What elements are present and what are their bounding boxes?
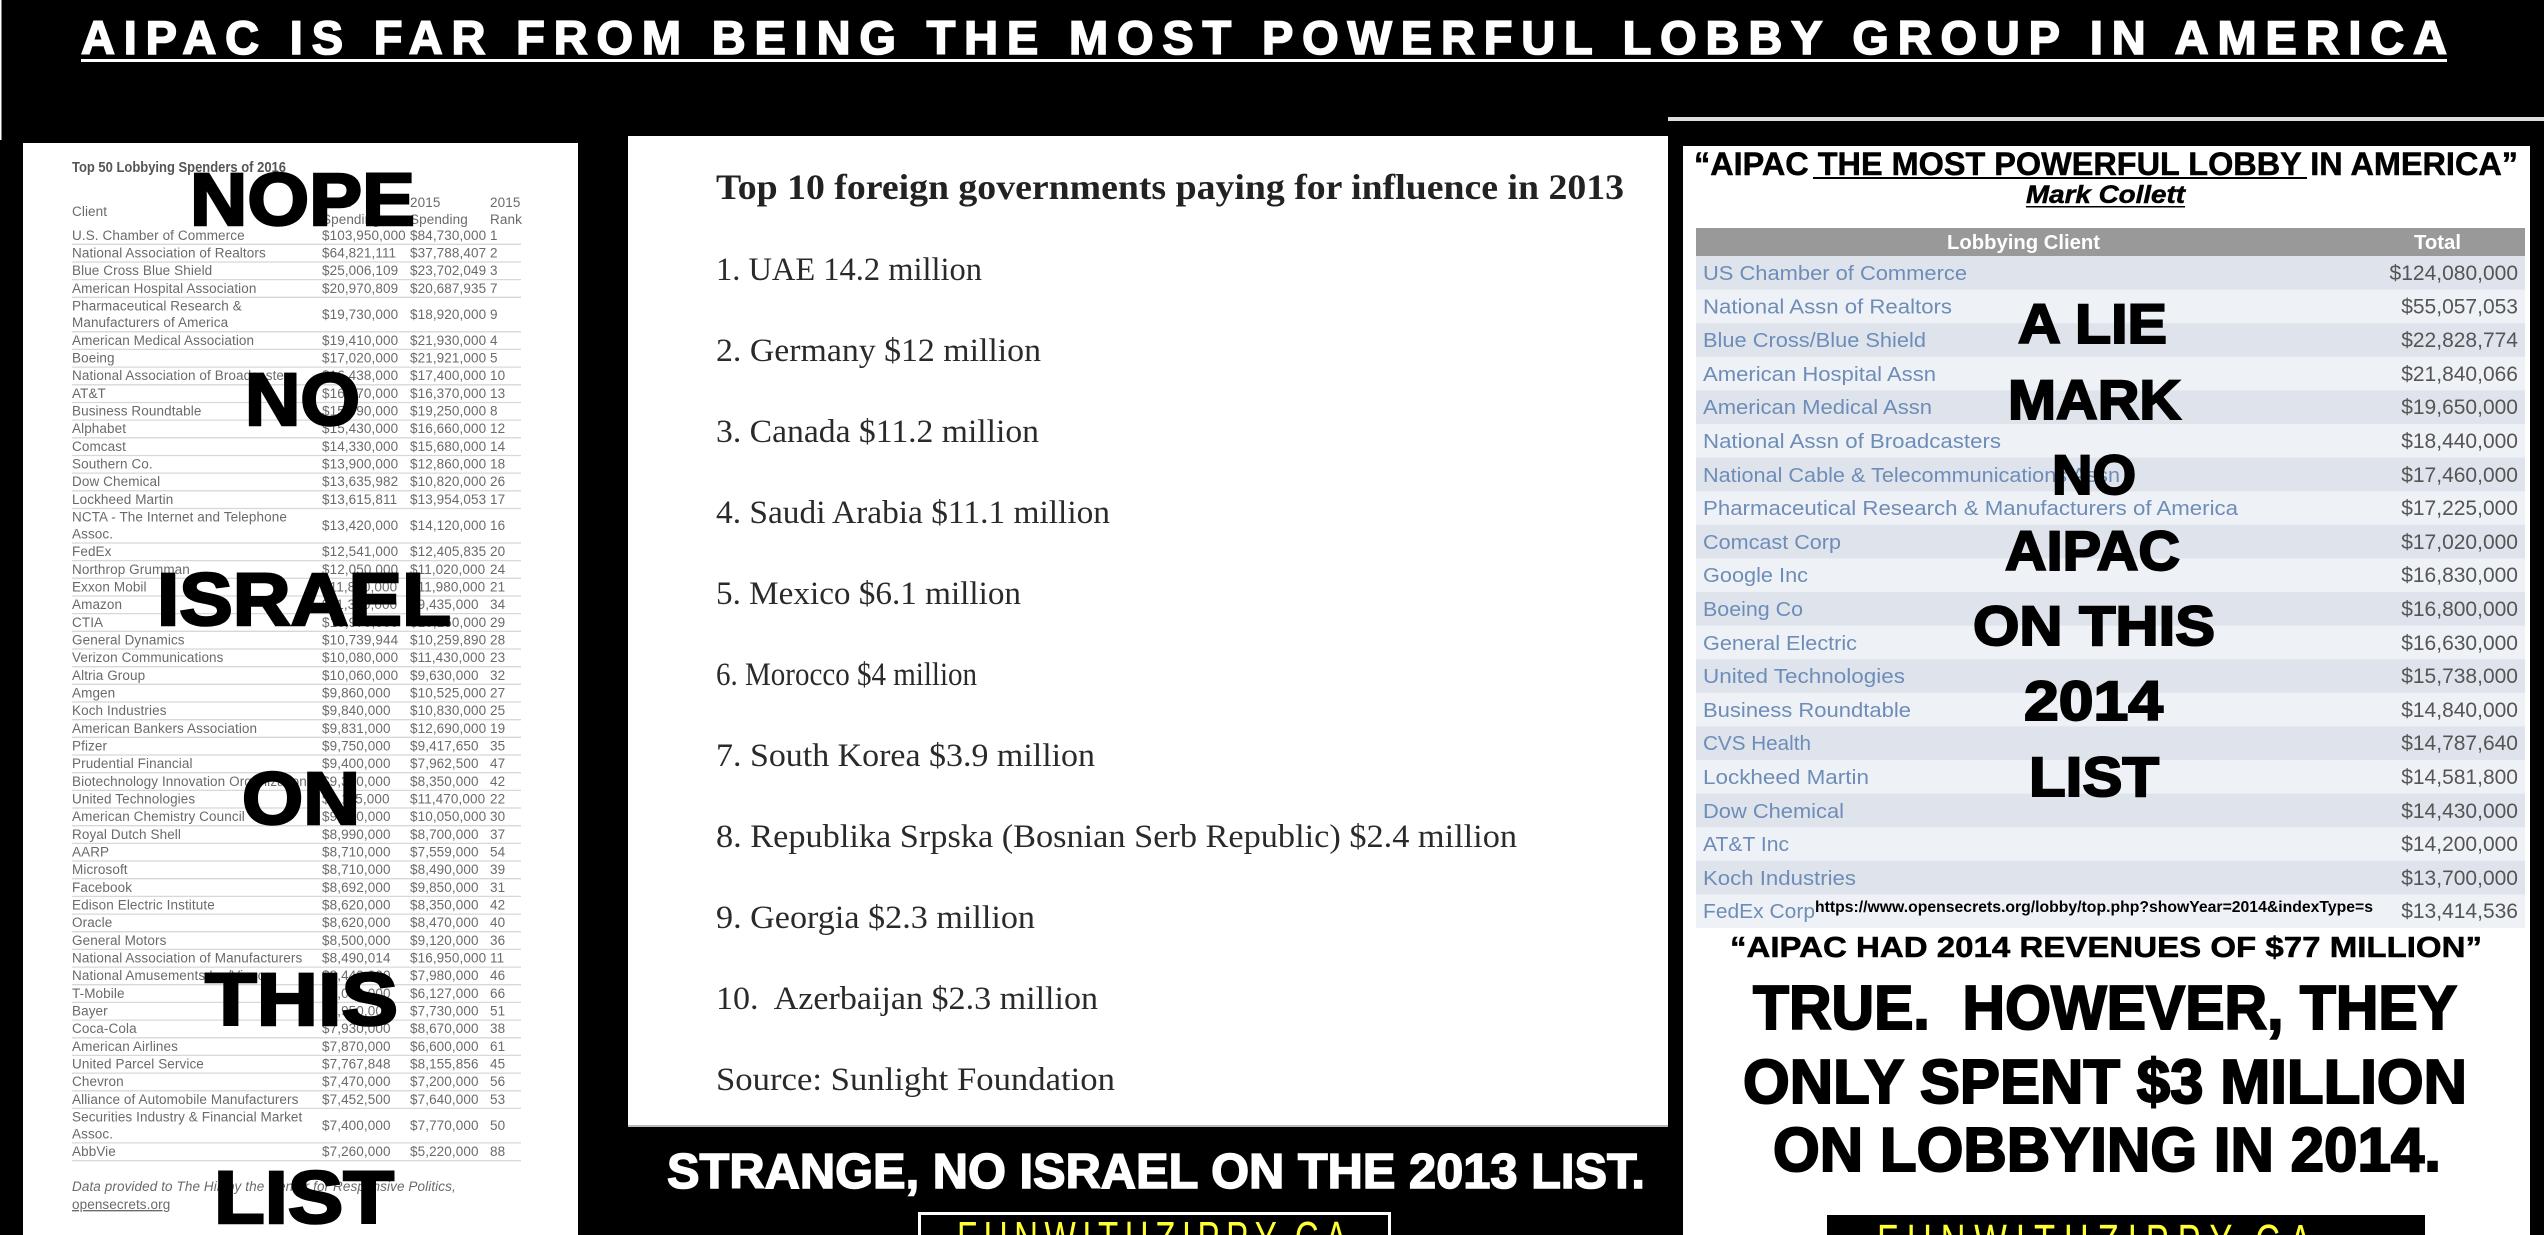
table: lobbying spenders: 5: [490, 350, 498, 366]
table: lobbying spenders: AT&T: [72, 386, 106, 401]
ranked list: 7. South Korea $3.9 million: [716, 738, 1095, 774]
table: lobbying spenders: 38: [490, 1021, 505, 1036]
table: lobbying spenders: $11,350,000: [322, 597, 397, 612]
table: 2014 lobbying clients: $13,414,536: [2401, 900, 2518, 923]
table: 2014 lobbying clients: Lobbying Client: [1947, 232, 2100, 254]
table: lobbying spenders: 88: [490, 1144, 505, 1159]
table: lobbying spenders: [72, 195, 522, 1212]
table: 2014 lobbying clients: Blue Cross/Blue Shield: [1703, 330, 1926, 352]
table: 2014 lobbying clients: Comcast Corp: [1703, 532, 1841, 554]
table: lobbying spenders: National Association of Broadcasters: [72, 368, 296, 383]
table: lobbying spenders: $13,615,811: [322, 492, 397, 507]
table: lobbying spenders: Comcast: [72, 439, 126, 454]
table: lobbying spenders: $19,410,000: [322, 333, 398, 348]
table: lobbying spenders: Client: [72, 204, 107, 219]
table: lobbying spenders: $7,980,000: [410, 968, 479, 983]
panel: top 10 foreign governments: [628, 136, 1668, 1127]
table: lobbying spenders: 51: [490, 1004, 505, 1018]
table: lobbying spenders: 53: [490, 1092, 505, 1107]
table: lobbying spenders: United Technologies: [72, 792, 195, 806]
table: lobbying spenders: 28: [490, 632, 505, 648]
table: lobbying spenders: $10,970,000: [322, 615, 398, 630]
table: 2014 lobbying clients: $18,440,000: [2401, 430, 2518, 453]
table: lobbying spenders: $17,400,000: [410, 368, 486, 383]
table: lobbying spenders: $11,020,000: [410, 562, 485, 577]
ranked list: [716, 252, 1517, 1098]
table: lobbying spenders: $10,080,000: [322, 650, 398, 665]
table: 2014 lobbying clients: Business Roundtable: [1703, 700, 1911, 722]
table: lobbying spenders: American Medical Association: [72, 333, 254, 348]
table: 2014 lobbying clients: FedEx Corp: [1703, 901, 1815, 923]
table: lobbying spenders: $5,220,000: [410, 1144, 479, 1159]
table: lobbying spenders: 13: [490, 386, 505, 401]
table: lobbying spenders: Edison Electric Institute: [72, 898, 215, 912]
table: lobbying spenders: 42: [490, 774, 505, 789]
table: lobbying spenders: Bayer: [72, 1004, 108, 1018]
table: lobbying spenders: $7,930,000: [322, 1021, 391, 1036]
table: lobbying spenders: Southern Co.: [72, 456, 153, 472]
table: lobbying spenders: Microsoft: [72, 862, 128, 877]
table: lobbying spenders: Biotechnology Innovation Organization: [72, 774, 307, 789]
table: lobbying spenders: $9,630,000: [410, 668, 479, 683]
ranked list: 8. Republika Srpska (Bosnian Serb Republic) $2.4 million: [716, 819, 1517, 855]
table: lobbying spenders: $7,400,000: [322, 1118, 391, 1133]
divider bar above right panel: [1668, 117, 2544, 121]
table: lobbying spenders: 66: [490, 986, 505, 1001]
table: lobbying spenders: $7,767,848: [322, 1056, 391, 1072]
table: lobbying spenders: Royal Dutch Shell: [72, 827, 181, 842]
table: lobbying spenders: $13,635,982: [322, 474, 398, 489]
table: lobbying spenders: General Dynamics: [72, 632, 185, 648]
overlay text: ON THIS: ON THIS: [1973, 594, 2215, 657]
table: 2014 lobbying clients: $16,830,000: [2401, 564, 2518, 587]
table: lobbying spenders: National Association of Manufacturers: [72, 950, 302, 966]
table: lobbying spenders: 27: [490, 686, 505, 700]
table: 2014 lobbying clients: American Hospital Assn: [1703, 364, 1936, 386]
table: lobbying spenders: Altria Group: [72, 668, 145, 683]
table: lobbying spenders: $8,490,000: [410, 862, 479, 877]
table: lobbying spenders: $13,954,053: [410, 492, 486, 507]
table: 2014 lobbying clients: Total: [2414, 232, 2461, 254]
table: lobbying spenders: $10,820,000: [410, 474, 486, 489]
table: 2014 lobbying clients: $21,840,066: [2401, 363, 2518, 386]
table: lobbying spenders: 11: [490, 950, 504, 966]
table: lobbying spenders: $16,370,000: [322, 386, 398, 401]
table: 2014 lobbying clients: $15,738,000: [2401, 665, 2518, 688]
table: lobbying spenders: 31: [490, 880, 505, 895]
table: lobbying spenders: $8,620,000: [322, 915, 391, 930]
table: lobbying spenders: $7,770,000: [410, 1118, 479, 1133]
table: lobbying spenders: Spending: [322, 212, 380, 227]
table: lobbying spenders: $8,350,000: [410, 898, 479, 912]
table: lobbying spenders: AbbVie: [72, 1144, 116, 1159]
overlay text: MARK: MARK: [2008, 368, 2181, 431]
table: lobbying spenders: $8,710,000: [322, 844, 391, 860]
table: lobbying spenders: 35: [490, 738, 505, 754]
ranked list: 10. Azerbaijan $2.3 million: [716, 981, 1098, 1017]
table: lobbying spenders: 16: [490, 518, 505, 533]
table: lobbying spenders: $9,831,000: [322, 721, 391, 736]
table: lobbying spenders: 1: [490, 228, 498, 243]
table: lobbying spenders: $10,739,944: [322, 632, 399, 648]
heading: Top 10 foreign governments paying for influence in 2013: [716, 167, 1624, 207]
table: lobbying spenders: $7,962,500: [410, 756, 479, 771]
table: lobbying spenders: 4: [490, 333, 498, 348]
table: 2014 lobbying clients: Pharmaceutical Research & Manufacturers of America: [1703, 498, 2239, 520]
table: lobbying spenders: $9,010,000: [322, 809, 391, 824]
table: lobbying spenders: $8,080,000: [322, 986, 391, 1001]
quote heading: “AIPAC THE MOST POWERFUL LOBBY IN AMERICA”: [1694, 146, 2518, 182]
table: 2014 lobbying clients: $17,225,000: [2401, 497, 2518, 520]
table: lobbying spenders: Alphabet: [72, 421, 126, 436]
ranked list: 4. Saudi Arabia $11.1 million: [716, 495, 1110, 531]
table: lobbying spenders: United Parcel Service: [72, 1056, 204, 1072]
table: lobbying spenders: Rank: [490, 212, 522, 227]
table: lobbying spenders: $9,120,000: [410, 933, 479, 948]
table: lobbying spenders: $8,710,000: [322, 862, 391, 877]
table: lobbying spenders: Spending: [410, 212, 468, 227]
table: 2014 lobbying clients: $22,828,774: [2401, 329, 2518, 352]
table: lobbying spenders: $10,830,000: [410, 703, 486, 718]
rebuttal text: TRUE. HOWEVER, THEY: [1753, 974, 2457, 1043]
table: 2014 lobbying clients: US Chamber of Commerce: [1703, 263, 1967, 285]
table: lobbying spenders: Securities Industry & Financial Market: [72, 1110, 303, 1124]
table: 2014 lobbying clients: Boeing Co: [1703, 599, 1803, 621]
table: lobbying spenders: $8,440,000: [322, 968, 391, 983]
table: lobbying spenders: 3: [490, 263, 498, 278]
overlay text: NOPE: NOPE: [190, 158, 415, 241]
table: 2014 lobbying clients: $13,700,000: [2401, 867, 2518, 890]
table: lobbying spenders: $10,050,000: [410, 809, 486, 824]
table: lobbying spenders: $7,870,000: [322, 1039, 391, 1054]
table: lobbying spenders: $10,525,000: [410, 686, 486, 700]
table: lobbying spenders: 39: [490, 862, 505, 877]
table: lobbying spenders: Koch Industries: [72, 703, 167, 718]
panel: 2014 lobbying list: [1683, 146, 2530, 1235]
table: lobbying spenders: National Association of Realtors: [72, 246, 266, 260]
table: lobbying spenders: American Airlines: [72, 1039, 178, 1054]
table: lobbying spenders: $16,370,000: [410, 386, 486, 401]
table: 2014 lobbying clients: $14,430,000: [2401, 800, 2518, 823]
table: 2014 lobbying clients: $14,200,000: [2401, 833, 2518, 856]
table: lobbying spenders: Alliance of Automobile Manufacturers: [72, 1092, 299, 1107]
table: lobbying spenders: AARP: [72, 844, 109, 860]
table: 2014 lobbying clients: $14,840,000: [2401, 699, 2518, 722]
table: lobbying spenders: Verizon Communications: [72, 650, 224, 665]
table: lobbying spenders: $20,687,935: [410, 281, 486, 296]
table: 2014 lobbying clients: United Technologies: [1703, 666, 1905, 688]
table: lobbying spenders: 18: [490, 456, 505, 472]
table: lobbying spenders: 10: [490, 368, 505, 383]
table: lobbying spenders: 32: [490, 668, 505, 683]
caption: strange, no Israel on the 2013 list: STRANGE, NO ISRAEL ON THE 2013 LIST.: [667, 1145, 1645, 1199]
rebuttal text: [1743, 974, 2467, 1185]
table: 2014 lobbying clients: [1696, 228, 2525, 928]
table: lobbying spenders: $11,840,000: [322, 580, 397, 594]
table: lobbying spenders: U.S. Chamber of Commerce: [72, 228, 245, 243]
table: 2014 lobbying clients: $16,630,000: [2401, 632, 2518, 655]
table: lobbying spenders: Northrop Grumman: [72, 562, 190, 577]
rebuttal text: ON LOBBYING IN 2014.: [1773, 1116, 2441, 1185]
table: lobbying spenders: 36: [490, 933, 505, 948]
table: lobbying spenders: 54: [490, 844, 506, 860]
table: lobbying spenders: $8,620,000: [322, 898, 391, 912]
table: lobbying spenders: $12,541,000: [322, 544, 398, 559]
table: 2014 lobbying clients: $124,080,000: [2390, 262, 2518, 285]
table: lobbying spenders: 2: [490, 246, 498, 260]
table: lobbying spenders: $8,490,014: [322, 950, 391, 966]
table: lobbying spenders: $9,750,000: [322, 738, 391, 754]
table: lobbying spenders: $9,850,000: [410, 880, 479, 895]
table: lobbying spenders: $20,970,809: [322, 281, 398, 296]
table: lobbying spenders: T-Mobile: [72, 986, 125, 1001]
table: lobbying spenders: $12,860,000: [410, 456, 486, 472]
table: 2014 lobbying clients: $16,800,000: [2401, 598, 2518, 621]
panel: top 50 lobbying spenders of 2016: [23, 143, 578, 1235]
table: lobbying spenders: $7,559,000: [410, 844, 479, 860]
table: lobbying spenders: $8,155,856: [410, 1056, 479, 1072]
table: 2014 lobbying clients: $55,057,053: [2401, 296, 2518, 319]
table: lobbying spenders: 29: [490, 615, 505, 630]
table: lobbying spenders: Oracle: [72, 915, 112, 930]
table: lobbying spenders: $10,060,000: [322, 668, 398, 683]
table: 2014 lobbying clients: CVS Health: [1703, 733, 1811, 755]
table: lobbying spenders: American Hospital Association: [72, 281, 256, 296]
table: lobbying spenders: 61: [490, 1039, 505, 1054]
table: 2014 lobbying clients: National Cable & Telecommunications Assn: [1703, 465, 2120, 487]
table: lobbying spenders: $15,430,000: [322, 421, 398, 436]
table: lobbying spenders: National Amusements Inc/Viacom: [72, 968, 277, 983]
table: 2014 lobbying clients: $14,581,800: [2401, 766, 2518, 789]
overlay text: NO: NO: [2052, 443, 2136, 506]
table: lobbying spenders: $7,452,500: [322, 1092, 391, 1107]
table: lobbying spenders: opensecrets.org: [72, 1197, 170, 1212]
table: lobbying spenders: $8,692,000: [322, 880, 391, 895]
table: lobbying spenders: 56: [490, 1074, 505, 1089]
table: lobbying spenders: $8,670,000: [410, 1021, 479, 1036]
table: lobbying spenders: $23,702,049: [410, 263, 486, 278]
table: lobbying spenders: 19: [490, 721, 505, 736]
table: lobbying spenders: 24: [490, 562, 506, 577]
table: lobbying spenders: $10,259,890: [410, 632, 486, 648]
table: 2014 lobbying clients: General Electric: [1703, 633, 1857, 655]
table: 2014 lobbying clients: Koch Industries: [1703, 868, 1856, 890]
table: lobbying spenders: 20: [490, 544, 505, 559]
table: lobbying spenders: $37,788,407: [410, 246, 486, 260]
table: lobbying spenders: $15,990,000: [322, 404, 398, 418]
table: lobbying spenders: $12,405,835: [410, 544, 486, 559]
table: lobbying spenders: $8,350,000: [410, 774, 479, 789]
table: lobbying spenders: 2015: [410, 195, 440, 210]
table: lobbying spenders: $16,950,000: [410, 950, 486, 966]
table: lobbying spenders: $64,821,111: [322, 246, 396, 260]
table: lobbying spenders: $14,120,000: [410, 518, 486, 533]
table: 2014 lobbying clients: $14,787,640: [2401, 732, 2518, 755]
table: lobbying spenders: 50: [490, 1118, 505, 1133]
ranked list: 5. Mexico $6.1 million: [716, 576, 1021, 612]
table: lobbying spenders: $18,920,000: [410, 307, 486, 322]
table: lobbying spenders: 23: [490, 650, 505, 665]
table: lobbying spenders: 22: [490, 792, 505, 806]
table: lobbying spenders: Boeing: [72, 350, 115, 366]
table: lobbying spenders: 25: [490, 703, 505, 718]
table: lobbying spenders: 30: [490, 809, 505, 824]
table: lobbying spenders: $9,435,000: [410, 597, 479, 612]
table: lobbying spenders: $6,600,000: [410, 1039, 479, 1054]
table: 2014 lobbying clients: National Assn of Broadcasters: [1703, 431, 2001, 453]
ranked list: 6. Morocco $4 million: [716, 657, 977, 693]
table: lobbying spenders: Data provided to The Hill by the Center for Responsive Politics,: [72, 1179, 456, 1194]
table: 2014 lobbying clients: $17,020,000: [2401, 531, 2518, 554]
table: lobbying spenders: $11,980,000: [410, 580, 485, 594]
table: lobbying spenders: 26: [490, 474, 505, 489]
table: lobbying spenders: 46: [490, 968, 505, 983]
table: lobbying spenders: $16,660,000: [410, 421, 486, 436]
table: lobbying spenders: Exxon Mobil: [72, 580, 147, 594]
table: 2014 lobbying clients: $17,460,000: [2401, 464, 2518, 487]
table: lobbying spenders: $13,900,000: [322, 456, 398, 472]
table: lobbying spenders: Prudential Financial: [72, 756, 193, 771]
title: AIPAC IS FAR FROM BEING THE MOST POWERFUL LOBBY GROUP IN AMERICA: [81, 11, 2447, 64]
table: lobbying spenders: Blue Cross Blue Shield: [72, 263, 212, 278]
table: lobbying spenders: $9,860,000: [322, 686, 391, 700]
table: lobbying spenders: 17: [490, 492, 505, 507]
overlay text: A LIE: A LIE: [2018, 292, 2167, 355]
table: lobbying spenders: 21: [490, 580, 505, 594]
table: lobbying spenders: Amazon: [72, 597, 122, 612]
table heading: Top 50 Lobbying Spenders of 2016: [72, 160, 286, 176]
table: lobbying spenders: 40: [490, 915, 505, 930]
table: lobbying spenders: CTIA: [72, 615, 103, 630]
table: lobbying spenders: 34: [490, 597, 506, 612]
table: lobbying spenders: 45: [490, 1056, 505, 1072]
table: lobbying spenders: NCTA - The Internet and Telephone: [72, 510, 287, 524]
table: lobbying spenders: $21,930,000: [410, 333, 486, 348]
table: lobbying spenders: $21,921,000: [410, 350, 486, 366]
table: lobbying spenders: 12: [490, 421, 505, 436]
table: lobbying spenders: Dow Chemical: [72, 474, 160, 489]
table: lobbying spenders: Facebook: [72, 880, 132, 895]
table: lobbying spenders: $7,200,000: [410, 1074, 479, 1089]
table: lobbying spenders: $11,430,000: [410, 650, 485, 665]
table: 2014 lobbying clients: Google Inc: [1703, 565, 1808, 587]
table: lobbying spenders: 14: [490, 439, 506, 454]
table: lobbying spenders: $103,950,000: [322, 228, 406, 243]
table: lobbying spenders: 8: [490, 404, 498, 418]
table: lobbying spenders: 2015: [490, 195, 520, 210]
ranked list: 9. Georgia $2.3 million: [716, 900, 1035, 936]
table: 2014 lobbying clients: Dow Chemical: [1703, 801, 1844, 823]
table: lobbying spenders: $17,020,000: [322, 350, 398, 366]
table: lobbying spenders: $8,990,000: [322, 827, 391, 842]
table: lobbying spenders: 7: [490, 281, 498, 296]
table: lobbying spenders: $9,417,650: [410, 738, 479, 754]
table: lobbying spenders: $8,700,000: [410, 827, 479, 842]
table: lobbying spenders: $16,438,000: [322, 368, 398, 383]
quote: AIPAC revenues: “AIPAC HAD 2014 REVENUES OF $77 MILLION”: [1730, 932, 2482, 964]
table: lobbying spenders: $7,730,000: [410, 1004, 479, 1018]
table: lobbying spenders: $9,400,000: [322, 756, 391, 771]
source url: https://www.opensecrets.org/lobby/top.php?showYear=2014&indexType=s: [1815, 899, 2373, 916]
table: lobbying spenders: $7,260,000: [322, 1144, 391, 1159]
table: lobbying spenders: $8,500,000: [322, 933, 391, 948]
table: lobbying spenders: $8,470,000: [410, 915, 479, 930]
overlay text: LIST: LIST: [2029, 745, 2159, 808]
rebuttal text: ONLY SPENT $3 MILLION: [1743, 1048, 2467, 1117]
table: lobbying spenders: Pharmaceutical Research &: [72, 298, 242, 314]
table: lobbying spenders: $6,127,000: [410, 986, 479, 1001]
table: lobbying spenders: FedEx: [72, 544, 112, 559]
table: lobbying spenders: Assoc.: [72, 526, 113, 542]
table: lobbying spenders: American Bankers Association: [72, 721, 257, 736]
overlay text: NO: NO: [245, 358, 360, 441]
ranked list: Source: Sunlight Foundation: [716, 1062, 1115, 1098]
table: lobbying spenders: $14,330,000: [322, 439, 398, 454]
table: lobbying spenders: $13,420,000: [322, 518, 398, 533]
attribution: Mark Collett: [2026, 181, 2187, 209]
table: lobbying spenders: $84,730,000: [410, 228, 486, 243]
table: lobbying spenders: Lockheed Martin: [72, 492, 173, 507]
table: lobbying spenders: $12,050,000: [322, 562, 398, 577]
table: lobbying spenders: $11,470,000: [410, 792, 485, 806]
table: lobbying spenders: $9,115,000: [322, 792, 390, 806]
table: lobbying spenders: Assoc.: [72, 1126, 113, 1142]
table: 2014 lobbying clients: Lockheed Martin: [1703, 767, 1869, 789]
table: 2014 lobbying clients: AT&T Inc: [1703, 834, 1789, 856]
table: lobbying spenders: $7,470,000: [322, 1074, 391, 1089]
table: lobbying spenders: 47: [490, 756, 505, 771]
table: lobbying spenders: American Chemistry Council: [72, 809, 245, 824]
table: lobbying spenders: $7,950,000: [322, 1004, 391, 1018]
table: lobbying spenders: $12,690,000: [410, 721, 486, 736]
table: lobbying spenders: 9: [490, 307, 498, 322]
table: lobbying spenders: Chevron: [72, 1074, 124, 1089]
table: lobbying spenders: General Motors: [72, 933, 167, 948]
table: lobbying spenders: $7,640,000: [410, 1092, 479, 1107]
ranked list: 2. Germany $12 million: [716, 333, 1041, 369]
table: lobbying spenders: 42: [490, 898, 505, 912]
overlay text: ON: ON: [242, 757, 360, 840]
table: lobbying spenders: 37: [490, 827, 505, 842]
overlay text: 2014: 2014: [2024, 669, 2163, 732]
table: lobbying spenders: Manufacturers of America: [72, 315, 229, 330]
overlay text: ISRAEL: ISRAEL: [157, 558, 451, 641]
table: lobbying spenders: Coca-Cola: [72, 1021, 137, 1036]
overlay text: AIPAC: AIPAC: [2005, 519, 2180, 582]
table: 2014 lobbying clients: American Medical Assn: [1703, 397, 1932, 419]
table: lobbying spenders: $19,250,000: [410, 404, 486, 418]
ranked list: 1. UAE 14.2 million: [716, 252, 982, 288]
table: 2014 lobbying clients: National Assn of Realtors: [1703, 297, 1952, 319]
table: lobbying spenders: Amgen: [72, 686, 115, 700]
ranked list: 3. Canada $11.2 million: [716, 414, 1039, 450]
table: lobbying spenders: $10,150,000: [410, 615, 486, 630]
table: lobbying spenders: $9,310,000: [322, 774, 391, 789]
overlay text: THIS: THIS: [205, 958, 398, 1041]
table: lobbying spenders: $15,680,000: [410, 439, 486, 454]
table: lobbying spenders: Business Roundtable: [72, 404, 201, 418]
table: lobbying spenders: $9,840,000: [322, 703, 391, 718]
table: lobbying spenders: 2016: [322, 195, 352, 210]
table: lobbying spenders: $19,730,000: [322, 307, 398, 322]
table: lobbying spenders: Pfizer: [72, 738, 108, 754]
table: lobbying spenders: $25,006,109: [322, 263, 398, 278]
table: 2014 lobbying clients: $19,650,000: [2401, 396, 2518, 419]
